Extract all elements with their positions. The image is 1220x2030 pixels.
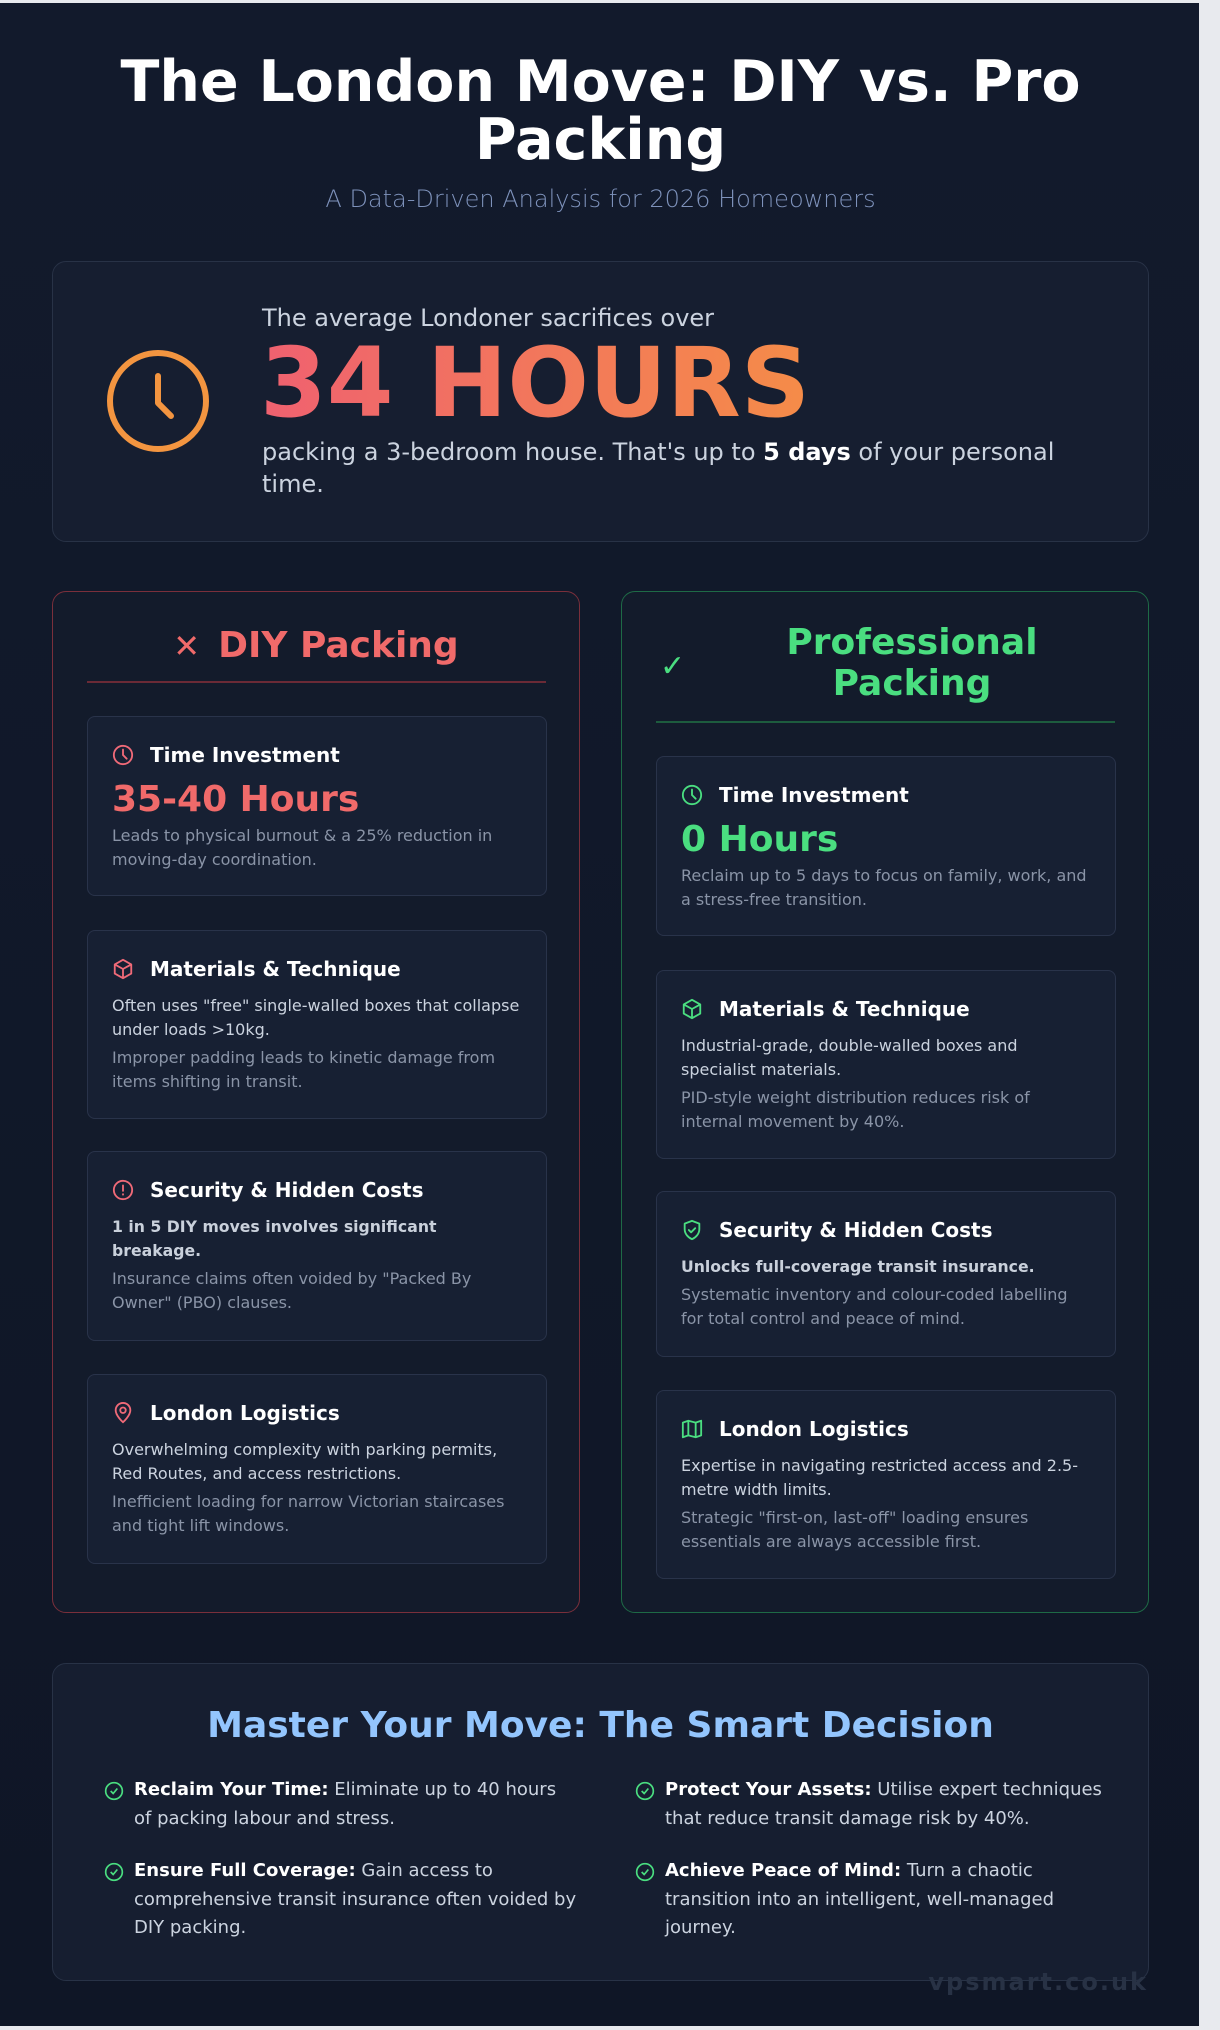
title <box>120 49 1080 173</box>
card: DIY logistics <box>87 1374 547 1564</box>
check icon: ✓ <box>660 649 685 684</box>
card: pro security: Systematic inventory and colour-coded labelling for total control and peace of mind. <box>681 1285 1068 1328</box>
card: pro security: Unlocks full-coverage transit insurance. <box>681 1257 1035 1276</box>
card: pro logistics: Strategic "first-on, last-off" loading ensures essentials are always accessible first. <box>681 1508 1028 1551</box>
Pro heading <box>786 622 1038 704</box>
card: pro logistics <box>656 1390 1116 1579</box>
icon: clock <box>107 350 209 452</box>
Pro heading: Packing <box>833 663 991 704</box>
title: Packing <box>475 107 726 173</box>
card: pro materials <box>656 970 1116 1159</box>
card: DIY security: 1 in 5 DIY moves involves significant breakage. <box>112 1217 436 1260</box>
card: DIY materials: Materials & Technique <box>150 957 401 981</box>
card: DIY logistics: Overwhelming complexity with parking permits, Red Routes, and access restrictions. <box>112 1440 497 1483</box>
card: DIY security: Security & Hidden Costs <box>150 1178 424 1202</box>
card: pro materials: Industrial-grade, double-walled boxes and specialist materials. <box>681 1036 1018 1079</box>
subtitle: A Data-Driven Analysis for 2026 Homeowners <box>325 185 876 213</box>
card: pro time: 0 Hours <box>681 819 838 860</box>
card: DIY materials: Often uses "free" single-walled boxes that collapse under loads >10kg. <box>112 996 519 1039</box>
card: pro time: Reclaim up to 5 days to focus on family, work, and a stress-free transition. <box>681 866 1087 909</box>
card: DIY security <box>87 1151 547 1341</box>
item: peace of mind: Achieve Peace of Mind: Turn a chaotic transition into an intelligent, well-managed journey. <box>665 1860 1054 1938</box>
hero intro text: The average Londoner sacrifices over <box>262 304 714 332</box>
card: pro materials: Materials & Technique <box>719 997 970 1021</box>
card: DIY materials <box>87 930 547 1119</box>
card: DIY time <box>87 716 547 896</box>
card: DIY materials: Improper padding leads to kinetic damage from items shifting in transit. <box>112 1048 495 1091</box>
DIY heading: ✕ DIY Packing <box>173 625 459 666</box>
card: pro logistics: London Logistics <box>719 1417 909 1441</box>
card: pro security: Security & Hidden Costs <box>719 1218 993 1242</box>
panel: hero stat <box>52 261 1149 542</box>
item: reclaim time: Reclaim Your Time: Eliminate up to 40 hours of packing labour and stress. <box>134 1779 556 1828</box>
item: full coverage: Ensure Full Coverage: Gain access to comprehensive transit insurance often voided by DIY packing. <box>134 1860 576 1938</box>
panel: summary <box>52 1663 1149 1981</box>
card: DIY time: Leads to physical burnout & a 25% reduction in moving-day coordination. <box>112 826 492 869</box>
panel: Professional packing <box>621 591 1149 1613</box>
title: The London Move: DIY vs. Pro <box>120 49 1080 115</box>
card: DIY logistics: Inefficient loading for narrow Victorian staircases and tight lift windows. <box>112 1492 504 1535</box>
card: pro logistics: Expertise in navigating restricted access and 2.5-metre width limits. <box>681 1456 1078 1499</box>
hero description: packing a 3-bedroom house. That's up to 5 days of your personal time. <box>262 438 1054 498</box>
Pro heading: Professional <box>786 622 1038 663</box>
item: protect assets: Protect Your Assets: Utilise expert techniques that reduce transit damage risk by 40%. <box>665 1779 1102 1828</box>
card: DIY logistics: London Logistics <box>150 1401 340 1425</box>
summary heading: Master Your Move: The Smart Decision <box>207 1705 994 1746</box>
card: pro materials: PID-style weight distribution reduces risk of internal movement by 40%. <box>681 1088 1030 1131</box>
card: DIY security: Insurance claims often voided by "Packed By Owner" (PBO) clauses. <box>112 1269 471 1312</box>
card: pro time: Time Investment <box>719 783 909 807</box>
panel: DIY packing <box>52 591 580 1613</box>
watermark: vpsmart.co.uk <box>928 1968 1148 1996</box>
card: DIY time: Time Investment <box>150 743 340 767</box>
card: pro time <box>656 756 1116 936</box>
card: DIY time: 35-40 Hours <box>112 779 359 820</box>
card: pro security <box>656 1191 1116 1357</box>
big number: 34 HOURS <box>260 327 810 439</box>
